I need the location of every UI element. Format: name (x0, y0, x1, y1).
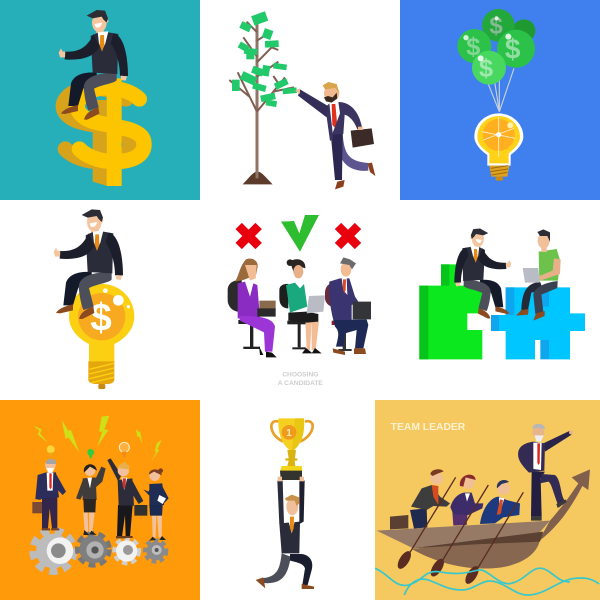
text: dollar symbol: $ (90, 297, 112, 340)
icon: gears (33, 531, 166, 571)
figure: leader standing on prow (518, 424, 573, 521)
icon: red cross left (239, 226, 259, 246)
panel: trophy (200, 400, 375, 600)
text: choosing a candidate: CHOOSING (282, 372, 318, 379)
figure: man reaching for money (295, 82, 375, 189)
figure: woman in navy with papers (143, 468, 169, 541)
figure: businessman sitting on bulb (54, 209, 123, 319)
icon: lightning bolts (33, 416, 162, 462)
icon: green puzzle piece (419, 264, 482, 359)
icon: red cross right (338, 226, 358, 246)
icon: green check (281, 215, 319, 252)
icon: blue puzzle piece (491, 287, 585, 359)
icon: gold trophy (271, 418, 313, 480)
figure: man lifting trophy (256, 477, 314, 589)
panel: team with gears (0, 400, 200, 600)
figure: senior man with briefcase (32, 458, 66, 530)
figure: woman in purple (228, 259, 277, 357)
figure: businessman sitting on green piece (454, 229, 511, 318)
icon: boat with arrow prow (377, 469, 590, 569)
text: balloon dollar symbol: $ (505, 33, 521, 64)
figure: rower one with briefcase (390, 469, 450, 529)
icon: money tree (229, 11, 297, 184)
heading: team leader: TEAM LEADER (391, 422, 466, 433)
icon: three oars (395, 477, 523, 586)
panel: team leader (375, 400, 600, 600)
text: medal number: 1 (286, 428, 292, 439)
figure: woman in teal with laptop (279, 259, 325, 353)
icon: 3D dollar sign (63, 78, 144, 186)
panel: puzzle partners (400, 200, 600, 400)
icon: dollar lightbulb (69, 284, 134, 389)
figure: man in green t-shirt with laptop (516, 229, 561, 321)
panel: dollar sign (0, 0, 200, 200)
panel: idea bulb (0, 200, 200, 400)
text: balloon dollar symbol: $ (489, 12, 503, 39)
icon: green dollar balloons (457, 9, 535, 85)
text: balloon dollar symbol: $ (466, 33, 480, 61)
figure: rower two in purple (450, 475, 483, 526)
icon: idea bulbs (47, 442, 129, 458)
icon: lightbulb (474, 113, 523, 181)
icon: balloon strings (487, 68, 514, 112)
text: balloon dollar symbol: $ (479, 55, 493, 83)
panel: lightbulb balloons (400, 0, 600, 200)
figure: businessman sitting (59, 10, 128, 120)
figure: blond man high-fiving (107, 458, 147, 538)
figure: woman in gray suit (76, 464, 106, 535)
icon: waves (375, 568, 599, 595)
figure: rower three in blue (480, 480, 520, 524)
panel: money tree (200, 0, 400, 200)
text: second caption line: A CANDIDATE (278, 380, 323, 387)
panel: choosing a candidate (200, 200, 400, 400)
figure: man in navy suit (325, 257, 371, 355)
